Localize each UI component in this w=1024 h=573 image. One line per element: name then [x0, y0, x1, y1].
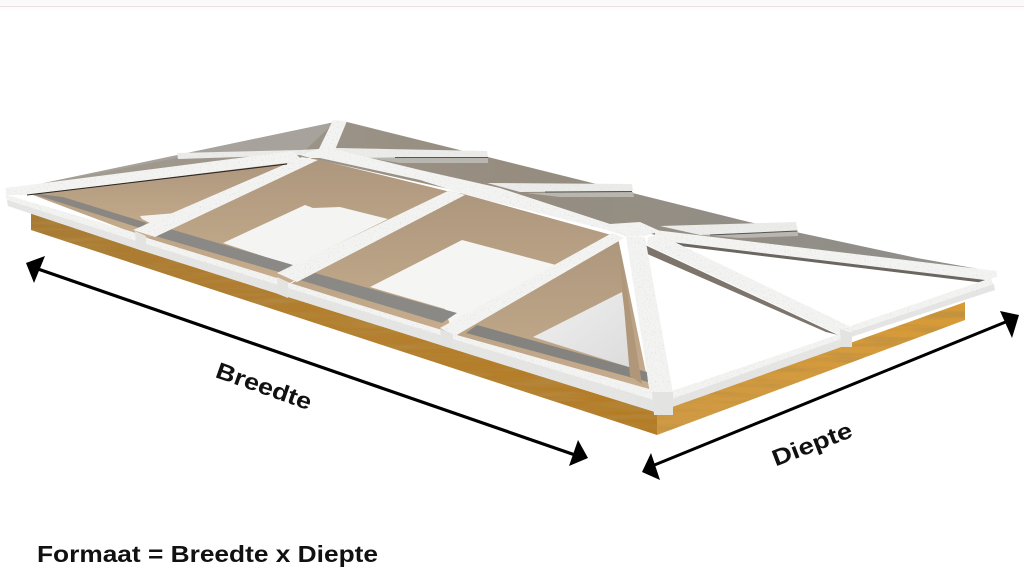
label: Breedte: Breedte [213, 357, 315, 415]
glazing rafters [133, 157, 853, 337]
arrow: width [26, 256, 588, 466]
back cross bars [177, 148, 798, 235]
corner hip bar [626, 236, 673, 393]
roof frame and glazing bars [5, 120, 997, 412]
frame posts [135, 231, 852, 415]
arrow: depth [642, 311, 1019, 480]
right frame [672, 278, 995, 407]
timber base [31, 213, 965, 435]
back bar reflections [370, 158, 798, 238]
left front glass pane [25, 160, 300, 238]
right white glass panes [645, 238, 985, 392]
second glass pane [147, 158, 455, 283]
right hip bar [655, 230, 997, 280]
third glass pane [290, 193, 615, 334]
fourth glass pane [453, 238, 650, 392]
front frame [5, 192, 655, 412]
peak bar [316, 120, 347, 155]
frame front faces [7, 200, 995, 412]
ridge bar and hubs [300, 147, 660, 236]
label: Diepte: Diepte [768, 417, 856, 471]
top strip [0, 0, 1024, 10]
formula: Formaat = Breedte x Diepte [37, 541, 378, 567]
shadow lines under bars [27, 158, 797, 235]
back glass panes [25, 122, 990, 271]
left hip bar [5, 151, 302, 195]
